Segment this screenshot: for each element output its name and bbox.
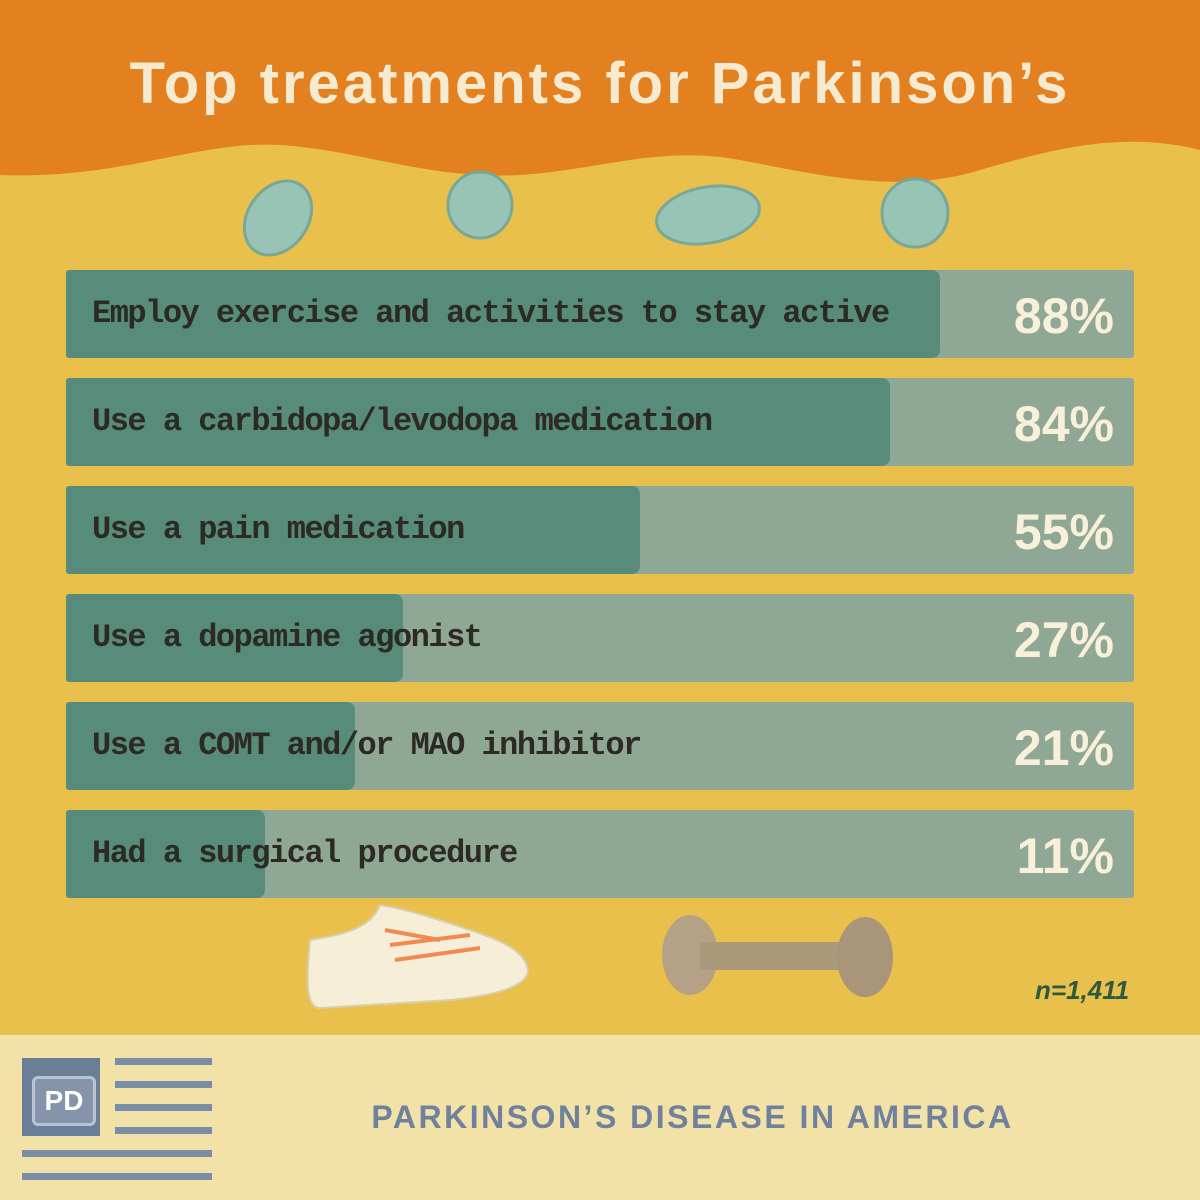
bar: COMT/MAO: 21% [1014, 720, 1114, 776]
bar: pain medication: 55% [1014, 504, 1114, 560]
bar: dopamine agonist: 27% [1014, 612, 1114, 668]
logo: PD [45, 1085, 83, 1116]
bar: COMT/MAO [66, 702, 1134, 790]
bar: surgical: 11% [1017, 828, 1114, 884]
bar: surgical: Had a surgical procedure [92, 835, 517, 872]
bar: pain medication [66, 486, 1134, 574]
bar: exercise: Employ exercise and activities to stay active [92, 295, 889, 332]
sample size: n=1,411 [1035, 975, 1129, 1005]
bar: COMT/MAO: Use a COMT and/or MAO inhibitor [92, 727, 641, 764]
logo [22, 1058, 212, 1180]
bar: exercise: 88% [1014, 288, 1114, 344]
bar: carbidopa/levodopa: Use a carbidopa/levodopa medication [92, 403, 712, 440]
bar: dopamine agonist: Use a dopamine agonist [92, 619, 481, 656]
icon: dumbbell [662, 915, 893, 997]
footer text: PARKINSON’S DISEASE IN AMERICA [371, 1099, 1014, 1135]
bar: exercise [66, 270, 1134, 358]
bar: carbidopa/levodopa [66, 378, 1134, 466]
bar: dopamine agonist [66, 594, 1134, 682]
background: orange header with wave [0, 0, 1200, 182]
icon: pills [242, 170, 950, 256]
bar: carbidopa/levodopa: 84% [1014, 396, 1114, 452]
title: Top treatments for Parkinson’s [130, 51, 1070, 116]
bar: surgical [66, 810, 1134, 898]
bar: pain medication: Use a pain medication [92, 511, 464, 548]
footer [0, 1035, 1200, 1200]
icon: shoe [306, 904, 529, 1009]
